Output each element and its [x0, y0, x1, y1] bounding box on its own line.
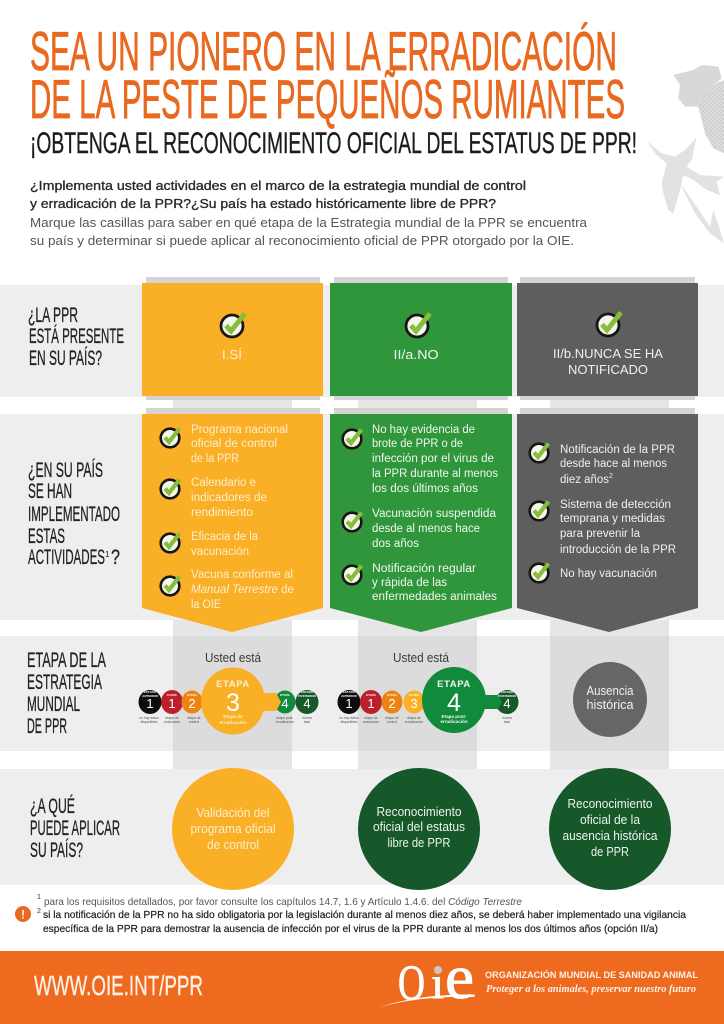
logo: OIE: e: [445, 944, 474, 1012]
activity text: brote de PPR o de: [372, 438, 463, 450]
chart: stage chain, etapa 3: erradicación: [219, 720, 247, 725]
illustration: sheep: [673, 65, 724, 153]
row label: Etapa de la estrategia mundial de PPR: ESTRATEGIA: [27, 671, 102, 694]
intro text: ¿Implementa usted actividades en el marco de la estrategia mundial de control: [30, 178, 526, 193]
activity text: desde al menos hace: [372, 523, 480, 535]
circle: reconocimiento ausencia histórica: oficial de la: [580, 813, 640, 827]
icon: warning: !: [21, 908, 25, 922]
activity text: [191, 477, 267, 519]
chart: stage chain, etapa 3: 3: [226, 689, 240, 717]
icon: check: [343, 566, 362, 584]
activity text: temprana y medidas: [560, 513, 665, 525]
circle: reconocimiento estatus libre: Reconocimiento: [376, 805, 462, 819]
activity text: Vacuna conforme al: [191, 569, 293, 581]
chart: stage chain, etapa 4: ETAPA: [409, 693, 420, 697]
illustration: goat: [647, 137, 724, 243]
row label: ¿La PPR está presente en su país?: [28, 304, 124, 370]
activity text: rendimiento: [191, 507, 253, 519]
chart: stage chain, etapa 3: erradicación: [276, 720, 294, 724]
icon: warning: [15, 906, 31, 922]
chart: stage chain, etapa 3: [138, 651, 318, 734]
background bands: [0, 285, 724, 885]
chart: stage chain, etapa 4: ANTERIOR: [341, 694, 358, 698]
activity text: infección por el virus de: [372, 453, 494, 465]
row label: ¿A qué puede aplicar su país?: PUEDE APLICAR: [30, 817, 120, 840]
icon: check: [161, 534, 180, 552]
chart: stage chain, etapa 4: ETAPA: [387, 693, 398, 697]
icon: check: [530, 564, 548, 582]
circle: reconocimiento ausencia histórica: de PPR: [591, 845, 629, 859]
row label: ¿En su país se han implementado estas actividades?: 1: [105, 550, 110, 559]
chart: stage chain, etapa 3: ETAPA: [167, 693, 178, 697]
intro text: su país y determinar si puede aplicar al reconocimiento oficial de PPR otorgado por la OIE.: [30, 233, 574, 248]
chart: stage chain, etapa 3: no hay datos: [139, 716, 159, 720]
chart: stage chain, etapa 3: ETAPA: [280, 693, 291, 697]
row label: ¿En su país se han implementado estas actividades?: ?: [111, 546, 120, 569]
icon: check: [406, 314, 430, 337]
circle: reconocimiento ausencia histórica: [549, 768, 671, 890]
chart: stage chain, etapa 4: ETAPA: [437, 679, 471, 690]
panel: I. Sí: [142, 283, 323, 396]
activity text: 2: [609, 473, 613, 480]
row label: ¿En su país se han implementado estas actividades?: ACTIVIDADES: [28, 546, 105, 569]
circle: reconocimiento estatus libre: libre de PPR: [388, 836, 450, 850]
row label: Etapa de la estrategia mundial de PPR: ETAPA DE LA: [27, 649, 106, 672]
chart: stage chain, etapa 3: ETAPA: [216, 679, 250, 690]
chart: stage chain, etapa 4: erradicación: [405, 720, 423, 724]
chart: stage chain, etapa 3: ESTADO: [301, 690, 314, 694]
column connectors: [173, 397, 669, 769]
chart: stage chain, etapa 4: evaluación: [363, 720, 379, 724]
panel: activities II/a: [330, 414, 512, 632]
activity text: No hay vacunación: [560, 568, 657, 580]
circle: validación del programa: de control: [207, 838, 259, 852]
activity text: [372, 508, 497, 550]
circle: ausencia histórica: [573, 662, 647, 737]
circle: ausencia histórica: histórica: [586, 698, 634, 712]
chart: stage chain, etapa 4: ETAPA: [366, 693, 377, 697]
activity text: desde hace al menos: [560, 458, 667, 470]
chart: stage chain, etapa 3: etapa post-: [277, 716, 293, 720]
footer organisation text: [485, 969, 699, 995]
panel shadows: [146, 277, 695, 428]
activity text: para prevenir la: [560, 528, 641, 540]
circle: validación del programa: Validación del: [196, 806, 270, 820]
activity text: los dos últimos años: [372, 483, 478, 495]
chart: stage chain, etapa 4: ESTADO: [501, 690, 514, 694]
chart: stage chain, etapa 3: 1: [146, 696, 154, 711]
icon: check: [530, 444, 548, 462]
footnotes: 2: [37, 908, 41, 915]
chart: stage chain, etapa 4: ESTADO: [343, 690, 356, 694]
circle: reconocimiento estatus libre: oficial del estatus: [373, 820, 465, 834]
panel: II/b. Nunca se ha notificado: [517, 283, 698, 396]
icon: check: [597, 312, 621, 336]
icon: check: [221, 314, 245, 337]
chart: stage chain, etapa 3: 1: [168, 696, 176, 711]
title: [30, 20, 625, 130]
panel: activities II/b: [517, 414, 698, 632]
row label: ¿La PPR está presente en su país?: EN SU PAÍS?: [29, 347, 102, 370]
footnotes: 1: [37, 894, 41, 901]
circle: ausencia histórica: Ausencia: [586, 684, 634, 698]
activity text: Eficacia de la: [191, 531, 259, 543]
icon: check: [343, 512, 362, 531]
footnotes: específica de la PPR para demostrar la ausencia de infección por el virus de la PPR durante al menos los dos últimos años (opción II/a): [43, 923, 658, 935]
chart: stage chain, etapa 4: Etapa post-: [441, 714, 467, 719]
icon: check: [161, 480, 180, 498]
chart: stage chain, etapa 3: control: [189, 720, 199, 724]
chart: stage chain, etapa 4: 1: [367, 696, 375, 711]
footnotes: [37, 894, 686, 935]
chart: stage chain, etapa 4: 3: [410, 696, 418, 711]
chart: stage chain, etapa 4: control: [387, 720, 397, 724]
icon: check: [530, 502, 548, 520]
footer organisation text: ORGANIZACIÓN MUNDIAL DE SANIDAD ANIMAL: [485, 969, 699, 980]
panel: I. Sí: I.SÍ: [222, 347, 243, 362]
panel: II/b. Nunca se ha notificado: NOTIFICADO: [568, 363, 648, 377]
row label: ¿La PPR está presente en su país?: ¿LA PPR: [28, 304, 78, 327]
activity text: Manual Terrestre de: [191, 584, 294, 596]
chart: stage chain, etapa 4: no hay datos: [339, 716, 359, 720]
chart: stage chain, etapa 4: etapa de: [407, 716, 421, 720]
logo: OIE: O: [398, 954, 425, 1010]
chart: stage chain, etapa 3: Etapa de: [223, 714, 243, 719]
activity text: [560, 444, 675, 486]
chart: stage chain, etapa 4: etapa de: [385, 716, 399, 720]
panel: II/a. No: [330, 283, 512, 396]
circle: reconocimiento ausencia histórica: ausencia histórica: [562, 829, 658, 843]
activity text: la OIE: [191, 599, 221, 611]
row label: Etapa de la estrategia mundial de PPR: MUNDIAL: [27, 693, 80, 716]
activity text: la PPR durante al menos: [372, 468, 498, 480]
chart: stage chain, etapa 3: norma: [302, 716, 312, 720]
chart: stage chain, etapa 3: etapa de: [165, 716, 179, 720]
icon: check: [161, 576, 180, 595]
chart: stage chain, etapa 4: fase: [504, 720, 510, 724]
activity text: Notificación de la PPR: [560, 444, 675, 456]
icon: check: [161, 428, 180, 447]
row label: Etapa de la estrategia mundial de PPR: [27, 649, 106, 738]
label: usted está: Usted está: [205, 651, 261, 665]
circle: validación del programa: [172, 768, 294, 890]
chart: stage chain, etapa 3: 2: [188, 696, 196, 711]
activity text: Calendario e: [191, 477, 256, 489]
chart: stage chain, etapa 4: 4: [447, 689, 461, 717]
chart: stage chain, etapa 3: ETAPA: [187, 693, 198, 697]
circle: reconocimiento estatus libre: [358, 768, 480, 890]
chart: stage chain, etapa 4: norma: [502, 716, 512, 720]
chart: stage chain, etapa 3: disponibles: [141, 720, 158, 724]
chart: stage chain, etapa 3: evaluación: [164, 720, 180, 724]
chart: stage chain, etapa 4: etapa de: [364, 716, 378, 720]
activity text: [372, 563, 497, 603]
activity text: [191, 531, 259, 558]
icon: check: [343, 430, 362, 448]
logo: OIE: ı: [431, 959, 444, 1008]
activity text: No hay evidencia de: [372, 424, 475, 436]
activity text: vacunación: [191, 546, 249, 558]
row label: ¿En su país se han implementado estas actividades?: ESTAS: [28, 525, 65, 548]
activity text: y rápida de las: [372, 577, 447, 589]
chart: stage chain, etapa 3: ANTERIOR: [142, 694, 159, 698]
intro text: [30, 178, 588, 248]
activity text: Programa nacional: [191, 424, 288, 436]
chart: stage chain, etapa 3: fase: [304, 720, 310, 724]
footnotes: si la notificación de la PPR no ha sido obligatoria por la legislación durante al menos diez años, se deberá haber implementado una vigilancia: [43, 909, 686, 921]
activity text: Vacunación suspendida: [372, 508, 497, 520]
row label: ¿En su país se han implementado estas actividades?: ¿EN SU PAÍS: [28, 459, 103, 482]
activity text: diez años: [560, 474, 609, 486]
activity text: oficial de control: [191, 438, 277, 450]
footer band: [0, 951, 724, 1024]
logo: OIE: [378, 944, 475, 1012]
row label: ¿A qué puede aplicar su país?: [30, 795, 120, 862]
chart: stage chain, etapa 4: 1: [345, 696, 353, 711]
row label: Etapa de la estrategia mundial de PPR: DE PPR: [27, 715, 67, 738]
activity text: [191, 424, 288, 465]
row label: ¿En su país se han implementado estas actividades?: IMPLEMENTADO: [28, 503, 120, 526]
chart: stage chain, etapa 3: 4: [281, 696, 289, 711]
footer url: WWW.OIE.INT/PPR: [34, 970, 203, 1001]
activity text: [560, 499, 676, 556]
chart: stage chain, etapa 3: 4: [303, 696, 311, 711]
intro text: y erradicación de la PPR?¿Su país ha estado históricamente libre de PPR?: [30, 196, 496, 211]
activity text: de la PPR: [191, 453, 239, 465]
chart: stage chain, etapa 4: POSTERIOR: [498, 694, 517, 698]
activity text: [191, 569, 294, 611]
footnotes: para los requisitos detallados, por favor consulte los capítulos 14.7, 1.6 y Artículo 1.4.6. del Código Terrestre: [44, 896, 522, 908]
activity text: Sistema de detección: [560, 499, 671, 511]
activity text: indicadores de: [191, 492, 267, 504]
row label: ¿En su país se han implementado estas actividades?: [28, 459, 120, 569]
intro text: Marque las casillas para saber en qué etapa de la Estrategia mundial de la PPR se encuentra: [30, 215, 588, 230]
row label: ¿A qué puede aplicar su país?: SU PAÍS?: [30, 839, 83, 862]
chart: stage chain, etapa 3: POSTERIOR: [298, 694, 317, 698]
activity text: dos años: [372, 538, 419, 550]
activity text: introducción de la PPR: [560, 544, 676, 556]
circle: reconocimiento ausencia histórica: Reconocimiento: [568, 797, 653, 811]
chart: stage chain, etapa 4: disponibles: [341, 720, 358, 724]
activity text: [372, 424, 498, 495]
chart: stage chain, etapa 4: [338, 651, 518, 733]
row label: ¿A qué puede aplicar su país?: ¿A QUÉ: [30, 795, 75, 818]
chart: stage chain, etapa 4: 2: [388, 696, 396, 711]
activity text: enfermedades animales: [372, 591, 497, 603]
panel: II/a. No: II/a.NO: [394, 348, 439, 362]
activity text: Notificación regular: [372, 563, 476, 575]
row label: ¿La PPR está presente en su país?: ESTÁ PRESENTE: [29, 325, 124, 348]
chart: stage chain, etapa 4: erradicación: [440, 719, 468, 724]
footer organisation text: Proteger a los animales, preservar nuestro futuro: [486, 984, 696, 995]
chart: stage chain, etapa 4: 4: [503, 696, 511, 711]
chart: stage chain, etapa 3: ESTADO: [144, 690, 157, 694]
label: usted está: Usted está: [393, 651, 449, 665]
circle: validación del programa: programa oficial: [190, 822, 276, 836]
row label: ¿En su país se han implementado estas actividades?: SE HAN: [28, 480, 72, 503]
panel: II/b. Nunca se ha notificado: II/b.NUNCA SE HA: [553, 347, 664, 361]
chart: stage chain, etapa 3: etapa de: [187, 716, 201, 720]
panel: activities I: [142, 414, 323, 632]
